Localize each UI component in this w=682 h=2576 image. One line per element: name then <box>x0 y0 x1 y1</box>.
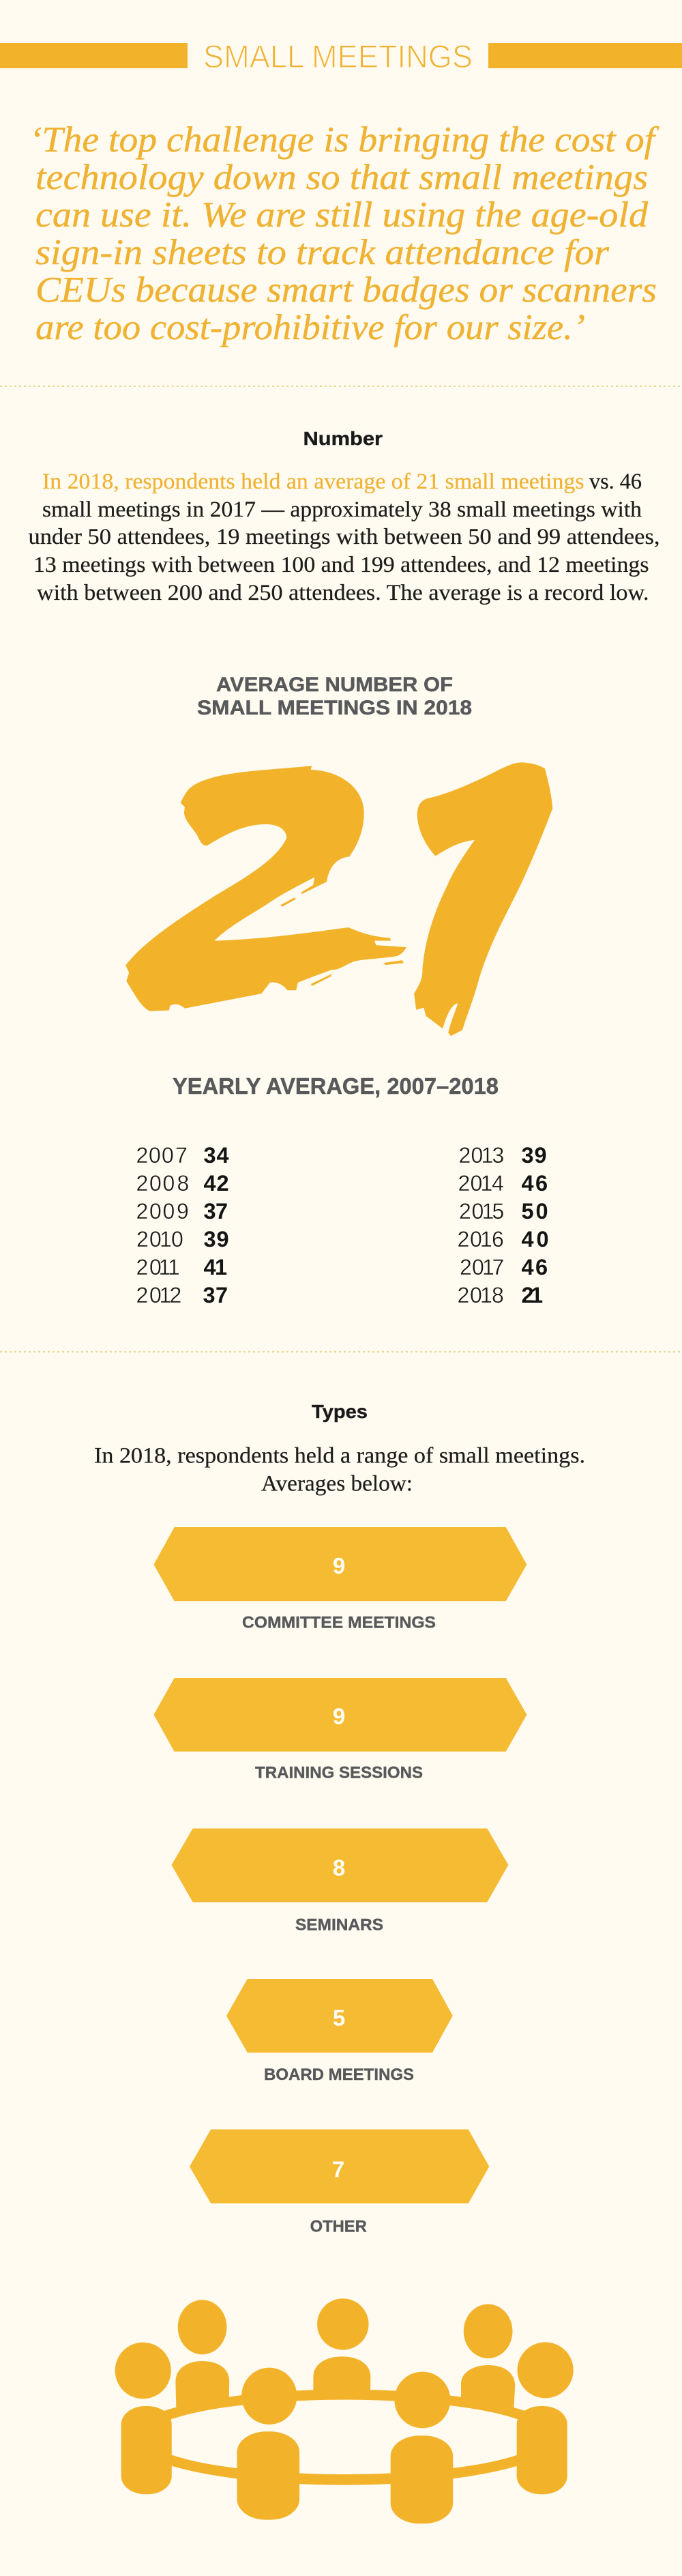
table: yearly averages 2013-2018: 2013 <box>458 1143 504 1168</box>
pull quote: technology down so that small meetings <box>35 158 648 197</box>
hexagon: other <box>190 2129 489 2235</box>
pull quote: CEUs because smart badges or scanners <box>35 270 657 310</box>
table: yearly averages 2013-2018: 46 <box>521 1171 548 1196</box>
pull quote: are too cost-prohibitive for our size.’ <box>35 308 585 347</box>
table: yearly averages 2013-2018 <box>457 1143 549 1307</box>
table: yearly averages 2013-2018: 21 <box>521 1283 543 1307</box>
heading: types: Types <box>312 1401 368 1422</box>
table: yearly averages 2013-2018: 39 <box>521 1143 547 1168</box>
table: yearly averages 2007-2012: 41 <box>203 1255 227 1279</box>
text block: number summary: 13 meetings with between 100 and 199 attendees, and 12 meetings <box>33 553 649 577</box>
table: yearly averages 2007-2012: 2010 <box>136 1227 183 1251</box>
heading: average number of small meetings <box>197 674 472 719</box>
text block: number summary <box>29 469 660 605</box>
hexagon: seminars: SEMINARS <box>295 1916 383 1934</box>
table: yearly averages 2013-2018: 2018 <box>457 1283 504 1307</box>
heading: yearly average: YEARLY AVERAGE, 2007–2018 <box>173 1073 499 1099</box>
table: yearly averages 2007-2012: 37 <box>203 1283 228 1307</box>
table: yearly averages 2013-2018: 46 <box>521 1255 548 1279</box>
hexagon: board meetings: 5 <box>333 2005 345 2031</box>
hexagon: other: 7 <box>332 2156 344 2182</box>
text block: types intro: In 2018, respondents held a range of small meetings. <box>94 1444 585 1468</box>
heading: number: Number <box>303 428 383 449</box>
pull quote <box>29 120 659 347</box>
table: yearly averages 2007-2012: 2011 <box>136 1255 180 1279</box>
table: yearly averages 2013-2018: 2016 <box>457 1227 504 1251</box>
hexagon: other: OTHER <box>310 2218 367 2235</box>
table: yearly averages 2007-2012: 37 <box>203 1199 228 1224</box>
hexagon: training sessions <box>154 1678 527 1782</box>
heading: average number of small meetings: SMALL MEETINGS IN 2018 <box>197 697 472 719</box>
table: yearly averages 2007-2012: 2009 <box>136 1199 189 1224</box>
table: yearly averages 2013-2018: 2017 <box>460 1255 504 1279</box>
table: yearly averages 2007-2012 <box>136 1143 229 1307</box>
hexagon: board meetings <box>226 1979 453 2084</box>
text block: types intro: Averages below: <box>261 1471 413 1496</box>
big brush number 21 <box>125 762 552 1036</box>
table: yearly averages 2007-2012: 34 <box>203 1143 229 1168</box>
hexagon: committee meetings: 9 <box>333 1553 345 1578</box>
text block: number summary: under 50 attendees, 19 meetings with between 50 and 99 attendees, <box>29 525 660 549</box>
text block: number summary: small meetings in 2017 — approximately 38 small meetings with <box>42 497 642 522</box>
pull quote: sign-in sheets to track attendance for <box>35 233 609 272</box>
hexagon: committee meetings: COMMITTEE MEETINGS <box>242 1613 436 1632</box>
table: yearly averages 2007-2012: 2007 <box>136 1143 188 1168</box>
hexagon: committee meetings <box>154 1527 527 1632</box>
icon: people seated around a table <box>115 2298 574 2523</box>
table: yearly averages 2007-2012: 2008 <box>136 1171 189 1196</box>
hexagon: training sessions: TRAINING SESSIONS <box>255 1763 423 1782</box>
hexagon: training sessions: 9 <box>333 1703 345 1729</box>
pull quote: ‘The top challenge is bringing the cost of <box>29 120 659 160</box>
table: yearly averages 2013-2018: 50 <box>521 1199 548 1224</box>
title banner: SMALL MEETINGS <box>203 38 473 74</box>
text block: types intro <box>94 1444 585 1496</box>
table: yearly averages 2013-2018: 2015 <box>459 1199 504 1224</box>
table: yearly averages 2013-2018: 2014 <box>458 1171 504 1196</box>
text block: number summary: vs. 46 <box>589 469 642 494</box>
text block: number summary: with between 200 and 250 attendees. The average is a record low. <box>37 581 649 605</box>
text block: number summary: In 2018, respondents held an average of 21 small meetings <box>42 469 584 494</box>
table: yearly averages 2013-2018: 40 <box>521 1227 549 1251</box>
hexagon: seminars <box>172 1829 508 1934</box>
title banner <box>0 38 682 74</box>
table: yearly averages 2007-2012: 2012 <box>136 1283 181 1307</box>
table: yearly averages 2007-2012: 42 <box>203 1171 229 1196</box>
table: yearly averages 2007-2012: 39 <box>203 1227 229 1251</box>
hexagon: board meetings: BOARD MEETINGS <box>264 2066 414 2084</box>
heading: average number of small meetings: AVERAGE NUMBER OF <box>216 674 453 696</box>
pull quote: can use it. We are still using the age-old <box>35 195 649 235</box>
hexagon: seminars: 8 <box>333 1855 345 1881</box>
